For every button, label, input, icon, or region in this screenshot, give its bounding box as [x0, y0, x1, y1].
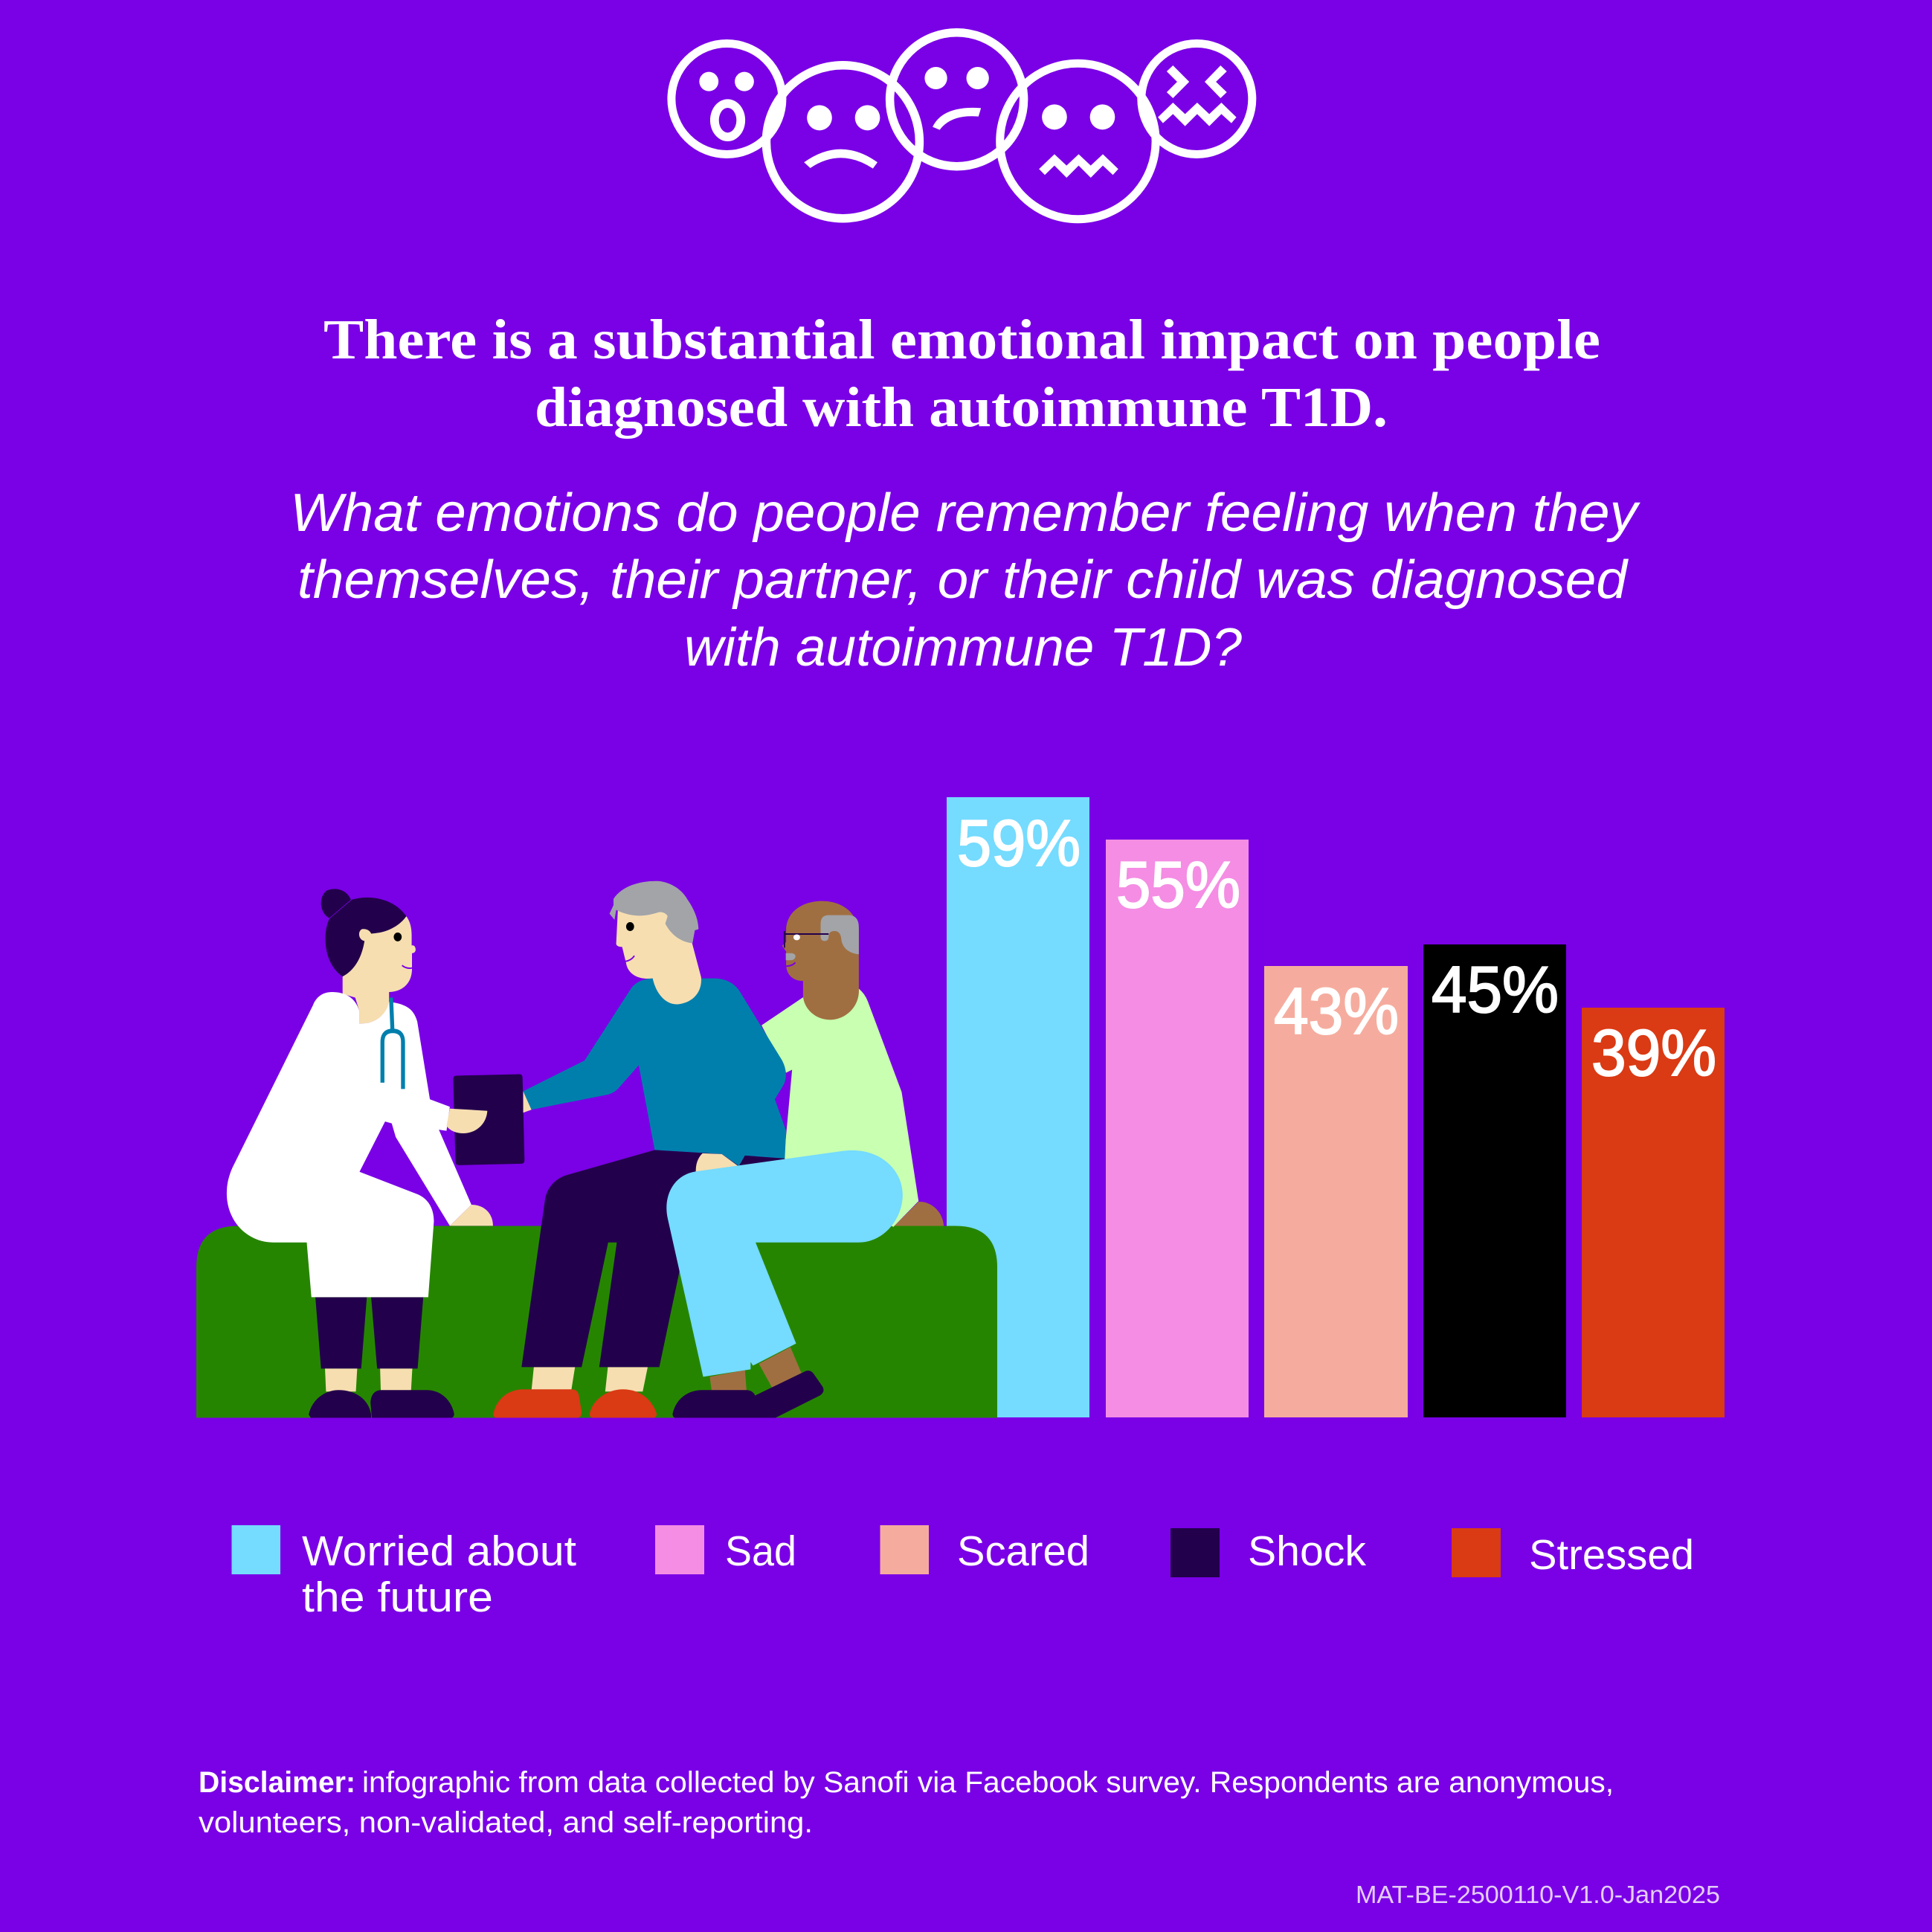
- icon: sad face: [766, 65, 919, 219]
- bar: shock 45%: 45%: [1432, 953, 1559, 1026]
- couch: [196, 1226, 997, 1417]
- bar chart: [947, 797, 1725, 1417]
- title: diagnosed with autoimmune T1D.: [535, 376, 1388, 439]
- legend item: scared: [880, 1525, 1089, 1575]
- legend item: worried about the future: [232, 1525, 576, 1621]
- bar: scared 43%: 43%: [1274, 974, 1399, 1048]
- title: [323, 309, 1600, 439]
- survey question: with autoimmune T1D?: [684, 618, 1242, 677]
- figure: couple on couch: [493, 881, 918, 1418]
- bar: stressed 39%: [1582, 1008, 1725, 1417]
- legend item: worried about the future: the future: [302, 1574, 493, 1621]
- disclaimer: infographic from data collected by Sanofi via Facebook survey. Respondents are anonymous,: [362, 1766, 1614, 1799]
- icon: unhappy face: [890, 33, 1024, 167]
- bar: worried about the future 59%: 59%: [957, 806, 1081, 880]
- bar: sad 55%: 55%: [1116, 848, 1240, 921]
- legend item: scared: Scared: [957, 1527, 1089, 1575]
- figure: doctor: [227, 889, 524, 1418]
- bar: shock 45%: [1423, 944, 1566, 1417]
- icon: stressed face: [1142, 43, 1252, 155]
- legend item: stressed: [1452, 1528, 1694, 1579]
- couple behind couch: brown hand: [893, 1202, 944, 1227]
- disclaimer: [199, 1766, 1614, 1839]
- figure: partner legs: [666, 1150, 903, 1418]
- disclaimer: Disclaimer:: [199, 1766, 355, 1799]
- legend item: worried about the future: Worried about: [302, 1527, 576, 1575]
- bar: worried about the future 59%: [947, 797, 1089, 1417]
- bar: sad 55%: [1106, 840, 1249, 1417]
- icon: anxious face: [1000, 63, 1156, 219]
- bar: stressed 39%: 39%: [1591, 1016, 1716, 1089]
- illustration: doctor and couple on couch: [196, 881, 997, 1418]
- legend item: shock: [1171, 1527, 1366, 1577]
- title: There is a substantial emotional impact on people: [323, 309, 1600, 371]
- legend item: sad: Sad: [725, 1527, 796, 1575]
- figure: partner torso and head: [761, 901, 918, 1227]
- bar: scared 43%: [1264, 966, 1408, 1417]
- legend item: stressed: Stressed: [1529, 1531, 1694, 1579]
- survey question: What emotions do people remember feeling when they: [290, 483, 1640, 543]
- survey question: [290, 483, 1640, 677]
- legend: [232, 1525, 1694, 1621]
- figure: older man: [493, 881, 786, 1418]
- icon: shocked face: [672, 43, 782, 155]
- survey question: themselves, their partner, or their child was diagnosed: [297, 550, 1629, 610]
- legend item: shock: Shock: [1248, 1527, 1366, 1575]
- icon: five emotion faces: [672, 33, 1252, 219]
- disclaimer: volunteers, non-validated, and self-reporting.: [199, 1806, 813, 1839]
- legend item: sad: [655, 1525, 796, 1575]
- reference code: MAT-BE-2500110-V1.0-Jan2025: [1356, 1881, 1720, 1908]
